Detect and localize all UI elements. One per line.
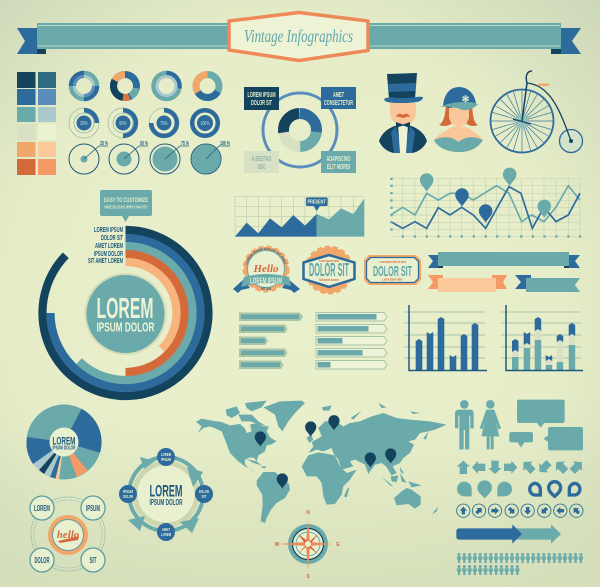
ribbon: long teal [428,252,580,268]
proportional circles with leader labels [69,141,230,174]
badge: hello lorem ipsum: LOREM IPSUM [250,276,282,286]
title plaque [229,12,368,60]
cycle diagram: SIT [202,494,207,499]
central donut diagram with labels [244,87,356,173]
right ribbon banner [369,23,581,54]
callout: easy to customize: EASY TO CUSTOMIZE [104,197,148,204]
title plaque: Vintage Infographics [244,26,353,46]
badge: dolor sit hexagon: Sit amet lorem [319,278,339,282]
percentage rings row: 75% [160,121,168,127]
callout: easy to customize: HIDE BLOCKS WITH OPACITY [104,204,148,210]
text: DOLOR SIT [309,260,349,280]
badge: hello lorem ipsum: Hello [252,263,279,275]
compass: S [306,574,310,580]
line chart with pins [390,168,581,238]
ribbon: short teal [515,275,580,292]
compass [275,510,340,580]
icon: lady: ✻ [462,94,469,104]
percentage rings row: 25% [80,121,88,127]
cycle diagram: IPSUM [161,457,171,462]
radial bar chart [42,227,208,396]
pie chart with centre label: IPSUM DOLOR [52,446,76,452]
compass: N [306,510,310,516]
left ribbon banner [17,23,229,54]
people pictogram rows [457,553,583,575]
badge: dolor sit label: Lorem ipsum dolor [382,278,403,282]
donut charts row [71,73,219,99]
compass: W [275,542,280,548]
percentage rings row: 50% [119,121,127,127]
percentage rings row [69,108,218,138]
cycle diagram: DOLOR [199,489,209,494]
cycle diagram: IPSUM [123,489,133,494]
cycle diagram: LOREM [161,452,171,457]
hello node diagram: hello [57,529,80,541]
badge: dolor sit label: Lorem ipsum dolor sit amet [380,260,406,264]
cycle diagram: LOREM [150,482,182,501]
large progress arrow [456,524,561,544]
speech bubbles [509,400,583,450]
central donut diagram with labels: ODIO [258,164,266,171]
horizontal bars [239,312,303,369]
hello node diagram: IPSUM [86,504,100,513]
radial bar chart: AMET LOREM [95,243,123,250]
callout: easy to customize [100,190,152,222]
hello node diagram: SIT [90,556,97,565]
radial chart centre label: LOREM [96,293,154,325]
central donut diagram with labels: A BESTAS [252,156,272,163]
icon: penny-farthing bicycle [490,71,582,153]
radial bar chart: DOLOR SIT [101,235,123,242]
icon: gentleman [379,73,427,153]
progress bars [316,312,387,369]
ribbon: peach [428,275,507,292]
percentage rings row: 100% [200,121,210,127]
proportional circles with leader labels: 50 % [140,141,148,147]
central donut diagram with labels: DOLOR SIT [251,100,272,107]
radial bar chart: SIT AMET LOREM [88,258,123,265]
badge: dolor sit hexagon: Lorem ipsum dolor [319,259,339,263]
pie chart with centre label [26,404,102,480]
proportional circles with leader labels: 100 % [220,141,230,147]
badge: hello lorem ipsum: LOREM IPSUM DOLOR SIT AMET [246,248,287,264]
badge: dolor sit label: DOLOR SIT [373,263,412,280]
radial bar chart: IPSUM DOLOR [94,251,123,258]
hello node diagram [30,496,105,572]
cycle diagram: AMET [162,527,170,532]
map marker icons [457,480,580,498]
column chart [404,305,487,370]
stacked column chart [501,305,583,370]
central donut diagram with labels: ELIT MORBI [327,164,350,171]
compass: E [336,542,340,548]
pie chart with centre label: LOREM [52,435,76,447]
world map: americas and greenland [196,401,305,523]
radial chart centre label: IPSUM DOLOR [96,320,155,334]
badge: hello lorem ipsum: EST 1976 [261,287,271,291]
area chart [235,197,364,237]
cycle diagram: DOLOR [123,494,133,499]
hello node diagram: LOREM [34,504,50,513]
badge: hello lorem ipsum [233,246,300,293]
badge: dolor sit label [364,255,421,285]
radial bar chart: LOREM IPSUM [94,227,123,234]
cycle diagram [119,448,213,541]
cycle diagram: LOREM [161,532,171,537]
central donut diagram with labels: LOREM IPSUM [248,92,276,99]
hello node diagram: DOLOR [34,556,50,565]
proportional circles with leader labels: 25 % [100,141,108,147]
icon: lady [434,87,483,152]
colour swatches [17,72,56,175]
radial chart centre label [84,273,166,355]
badge: dolor sit hexagon [304,247,354,293]
world map: eurasia, africa and oceania [302,403,447,515]
central donut diagram with labels: ADAPISCING [326,156,351,163]
cycle diagram: IPSUM DOLOR [150,498,183,507]
central donut diagram with labels: CONSECTETUR [324,100,353,107]
map location pins [255,415,396,489]
central donut diagram with labels: AMET [333,92,344,99]
proportional circles with leader labels: 75 % [181,141,189,147]
people icons [455,400,501,449]
arrow icons [457,457,586,477]
circled arrow icons [457,504,583,517]
area chart: PRESENT [307,200,326,206]
